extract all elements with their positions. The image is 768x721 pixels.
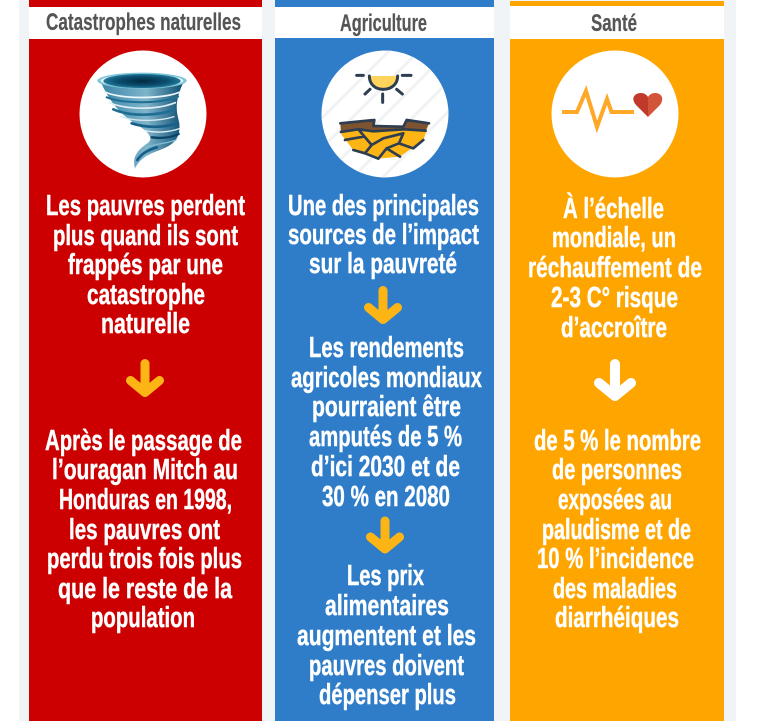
text: prix alimentaires: augmentent et les <box>297 620 476 652</box>
panel: agriculture <box>275 0 494 721</box>
text: paludisme: 10 % l’incidence <box>537 543 694 575</box>
text: rendements agricoles: 30 % en 2080 <box>322 481 450 513</box>
text: ouragan mitch: perdu trois fois plus <box>47 543 242 575</box>
text: les pauvres perdent plus: catastrophe <box>87 279 205 311</box>
text: rendements agricoles: amputés de 5 % <box>309 421 462 453</box>
text: prix alimentaires <box>297 560 476 711</box>
text: prix alimentaires: Les prix <box>347 560 424 592</box>
text: les pauvres perdent plus: plus quand ils sont <box>53 220 238 252</box>
text: rendements agricoles: Les rendements <box>309 332 464 364</box>
text: paludisme: de personnes <box>552 454 682 486</box>
text: rechauffement: mondiale, un <box>552 222 676 254</box>
text: principales sources <box>288 190 479 280</box>
text: ouragan mitch: les pauvres ont <box>69 514 220 546</box>
text: rechauffement: À l’échelle <box>563 191 664 225</box>
heading: sante: Santé <box>591 10 637 37</box>
text: ouragan mitch: l’ouragan Mitch au <box>52 454 238 486</box>
text: ouragan mitch: que le reste de la <box>58 573 233 605</box>
heading: sante <box>510 6 724 39</box>
text: prix alimentaires: pauvres doivent <box>309 650 464 682</box>
text: ouragan mitch: population <box>91 602 195 634</box>
text: rendements agricoles: agricoles mondiaux <box>291 362 482 394</box>
arrow: down <box>368 290 398 320</box>
text: rendements agricoles: d’ici 2030 et de <box>311 451 460 483</box>
arrow: down <box>599 364 631 396</box>
panel: catastrophes naturelles <box>29 0 262 721</box>
text: paludisme: paludisme et de <box>542 514 691 546</box>
arrow: down <box>130 364 160 392</box>
text: rechauffement <box>528 191 702 344</box>
text: prix alimentaires: alimentaires <box>325 590 449 622</box>
text: les pauvres perdent plus: Les pauvres perdent <box>46 190 245 222</box>
text: principales sources: Une des principales <box>288 190 479 222</box>
text: rechauffement: 2-3 C° risque <box>551 282 678 314</box>
text: paludisme <box>534 425 701 634</box>
text: principales sources: sources de l’impact <box>288 219 479 251</box>
heading: catastrophes naturelles: Catastrophes naturelles <box>46 9 241 36</box>
icon: sun and cracked soil <box>320 50 450 180</box>
text: ouragan mitch <box>45 425 242 634</box>
arrow: down <box>370 521 400 549</box>
icon: tornado <box>80 50 206 178</box>
text: les pauvres perdent plus <box>46 190 245 340</box>
text: ouragan mitch: Honduras en 1998, <box>59 484 232 516</box>
text: les pauvres perdent plus: frappés par une <box>68 249 223 281</box>
text: paludisme: des maladies <box>553 573 677 605</box>
text: ouragan mitch: Après le passage de <box>45 425 242 457</box>
text: les pauvres perdent plus: naturelle <box>101 308 190 340</box>
text: rendements agricoles <box>291 332 482 513</box>
text: paludisme: diarrhéiques <box>555 602 679 634</box>
text: principales sources: sur la pauvreté <box>309 248 457 280</box>
text: rechauffement: réchauffement de <box>528 252 702 284</box>
heading: agriculture: Agriculture <box>340 10 427 37</box>
text: prix alimentaires: dépenser plus <box>319 679 456 711</box>
text: paludisme: exposées au <box>558 484 672 516</box>
text: paludisme: de 5 % le nombre <box>534 425 701 457</box>
text: rechauffement: d’accroître <box>561 312 667 344</box>
heading: agriculture <box>275 7 494 38</box>
text: rendements agricoles: pourraient être <box>312 391 461 423</box>
panel: sante <box>510 0 724 721</box>
heading: catastrophes naturelles <box>29 7 262 39</box>
icon: heartbeat <box>552 50 678 178</box>
